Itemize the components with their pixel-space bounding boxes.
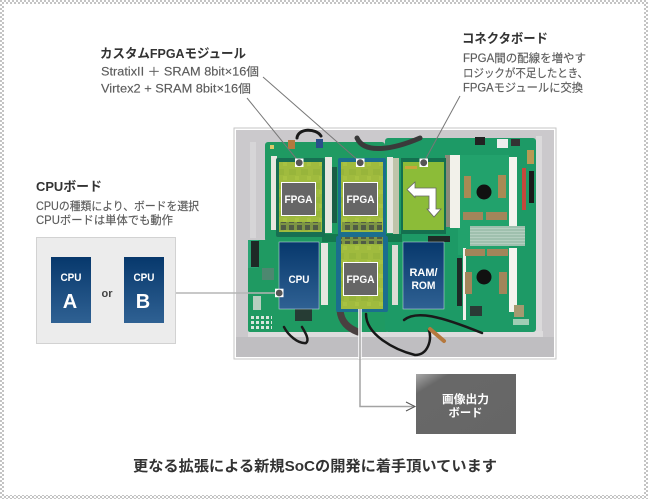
box: video output board: ボード	[448, 406, 482, 420]
RAM/ROM module: ROM	[412, 280, 436, 292]
FPGA label: left: FPGA	[284, 194, 313, 206]
heading: custom FPGA module	[100, 46, 259, 96]
CPU A card: A	[63, 291, 77, 313]
FPGA label: center: FPGA	[346, 194, 375, 206]
heading: connector board: FPGA間の配線を増やす	[463, 52, 586, 65]
CPU A card	[51, 257, 91, 323]
heading: custom FPGA module: StratixII ＋ SRAM 8bit×16個	[101, 66, 259, 78]
CPU B card: B	[136, 291, 150, 313]
panel: board photo	[234, 128, 556, 359]
CPU B card	[124, 257, 164, 323]
heading: CPU board: CPUボードは単体でも動作	[36, 213, 173, 227]
footer message: 更なる拡張による新規SoCの開発に着手頂いています	[133, 457, 497, 475]
RAM/ROM module	[403, 242, 444, 309]
module: FPGA lower frame	[336, 236, 388, 312]
heading: custom FPGA module: Virtex2 + SRAM 8bit×16個	[101, 82, 251, 96]
heading: CPU board	[36, 179, 199, 227]
leader lines	[247, 77, 460, 162]
CPU A card: CPU	[60, 272, 82, 284]
FPGA label: lower	[344, 262, 378, 296]
box: video output board	[416, 374, 516, 434]
module: FPGA left	[276, 158, 325, 237]
heading: connector board	[462, 31, 588, 94]
sockets	[271, 156, 277, 230]
heading: connector board: コネクタボード	[462, 31, 548, 46]
connector line: CPU	[176, 292, 279, 294]
FPGA label: center	[344, 182, 378, 216]
FPGA label: left	[282, 182, 316, 216]
module: connector board	[401, 158, 446, 234]
cables	[284, 130, 482, 355]
CPU B card: CPU	[134, 272, 155, 284]
CPU module	[279, 242, 319, 309]
circuit boards	[265, 142, 385, 242]
heading: CPU board: CPUボード	[36, 179, 102, 194]
callout dots	[275, 158, 428, 297]
arrow: to video output board	[360, 309, 415, 411]
heading: CPU board: CPUの種類により、ボードを選択	[36, 199, 199, 213]
or label: or	[102, 288, 113, 300]
heading: custom FPGA module: カスタムFPGAモジュール	[100, 46, 246, 61]
FPGA label: lower: FPGA	[346, 274, 375, 286]
panel: CPU options	[36, 238, 176, 344]
module: FPGA center	[338, 158, 386, 237]
heading: connector board: FPGAモジュールに交換	[463, 82, 583, 94]
RAM/ROM module: RAM/	[410, 267, 438, 279]
CPU module: CPU	[288, 274, 310, 286]
ICs on right board	[464, 176, 471, 198]
heading: connector board: ロジックが不足したとき、	[463, 66, 588, 80]
box: video output board: 画像出力	[442, 392, 489, 406]
